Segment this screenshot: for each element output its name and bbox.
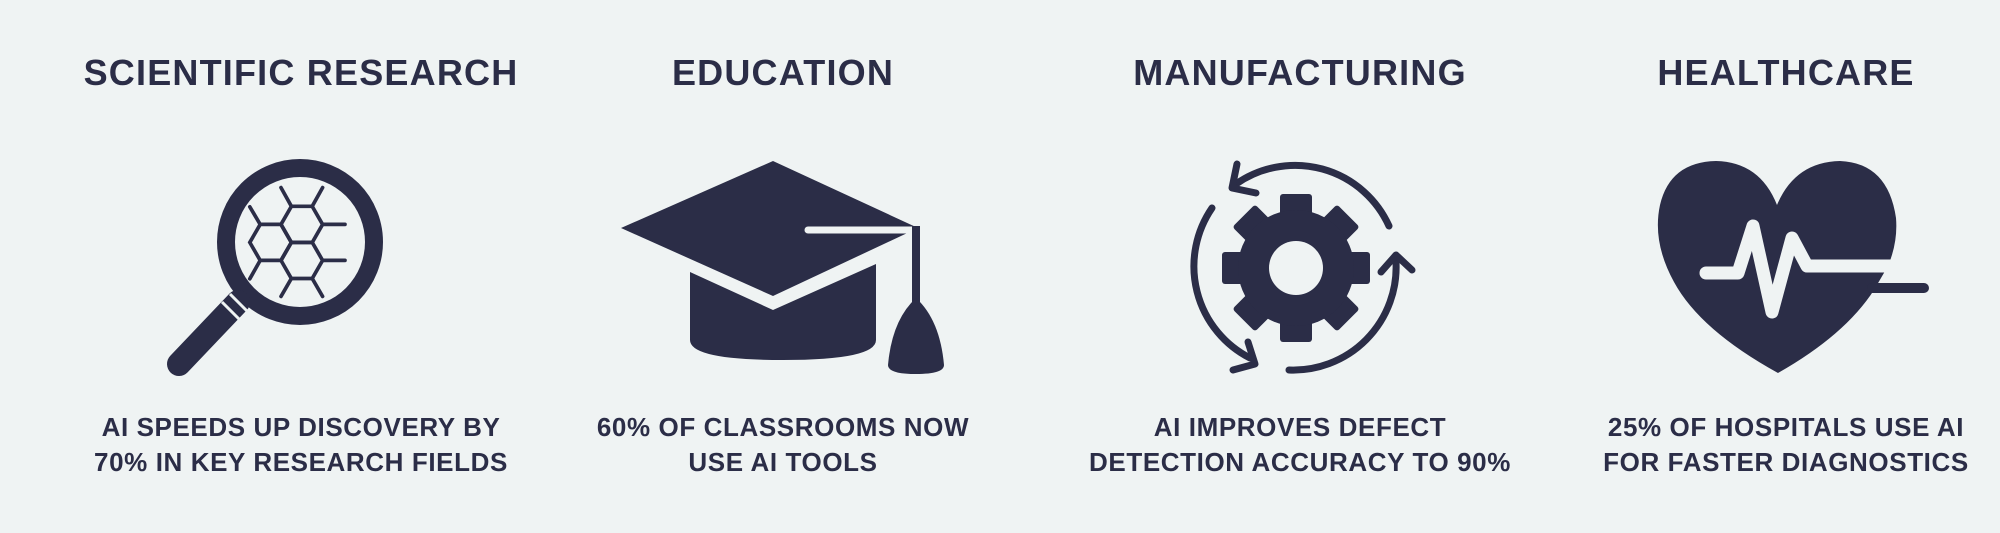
icon: heart with ECG [1658, 161, 1924, 373]
caption: manufacturing [1089, 412, 1511, 477]
caption: manufacturing: AI IMPROVES DEFECT [1154, 412, 1446, 442]
caption: education: USE AI TOOLS [688, 447, 878, 477]
icon: gear with arrows [1194, 164, 1412, 370]
caption: healthcare: 25% OF HOSPITALS USE AI [1608, 412, 1964, 442]
caption: education [597, 412, 969, 477]
caption: healthcare [1603, 412, 1969, 477]
caption: manufacturing: DETECTION ACCURACY TO 90% [1089, 447, 1511, 477]
title: education: EDUCATION [672, 52, 894, 93]
caption: education: 60% OF CLASSROOMS NOW [597, 412, 969, 442]
title: healthcare: HEALTHCARE [1657, 52, 1915, 93]
caption: research: AI SPEEDS UP DISCOVERY BY [102, 412, 500, 442]
caption: research [94, 412, 508, 477]
caption: research: 70% IN KEY RESEARCH FIELDS [94, 447, 508, 477]
caption: healthcare: FOR FASTER DIAGNOSTICS [1603, 447, 1969, 477]
icon: magnifying glass [179, 168, 374, 364]
title: manufacturing: MANUFACTURING [1133, 52, 1467, 93]
title: scientific research: SCIENTIFIC RESEARCH [84, 52, 518, 93]
icon: graduation cap [621, 161, 944, 374]
